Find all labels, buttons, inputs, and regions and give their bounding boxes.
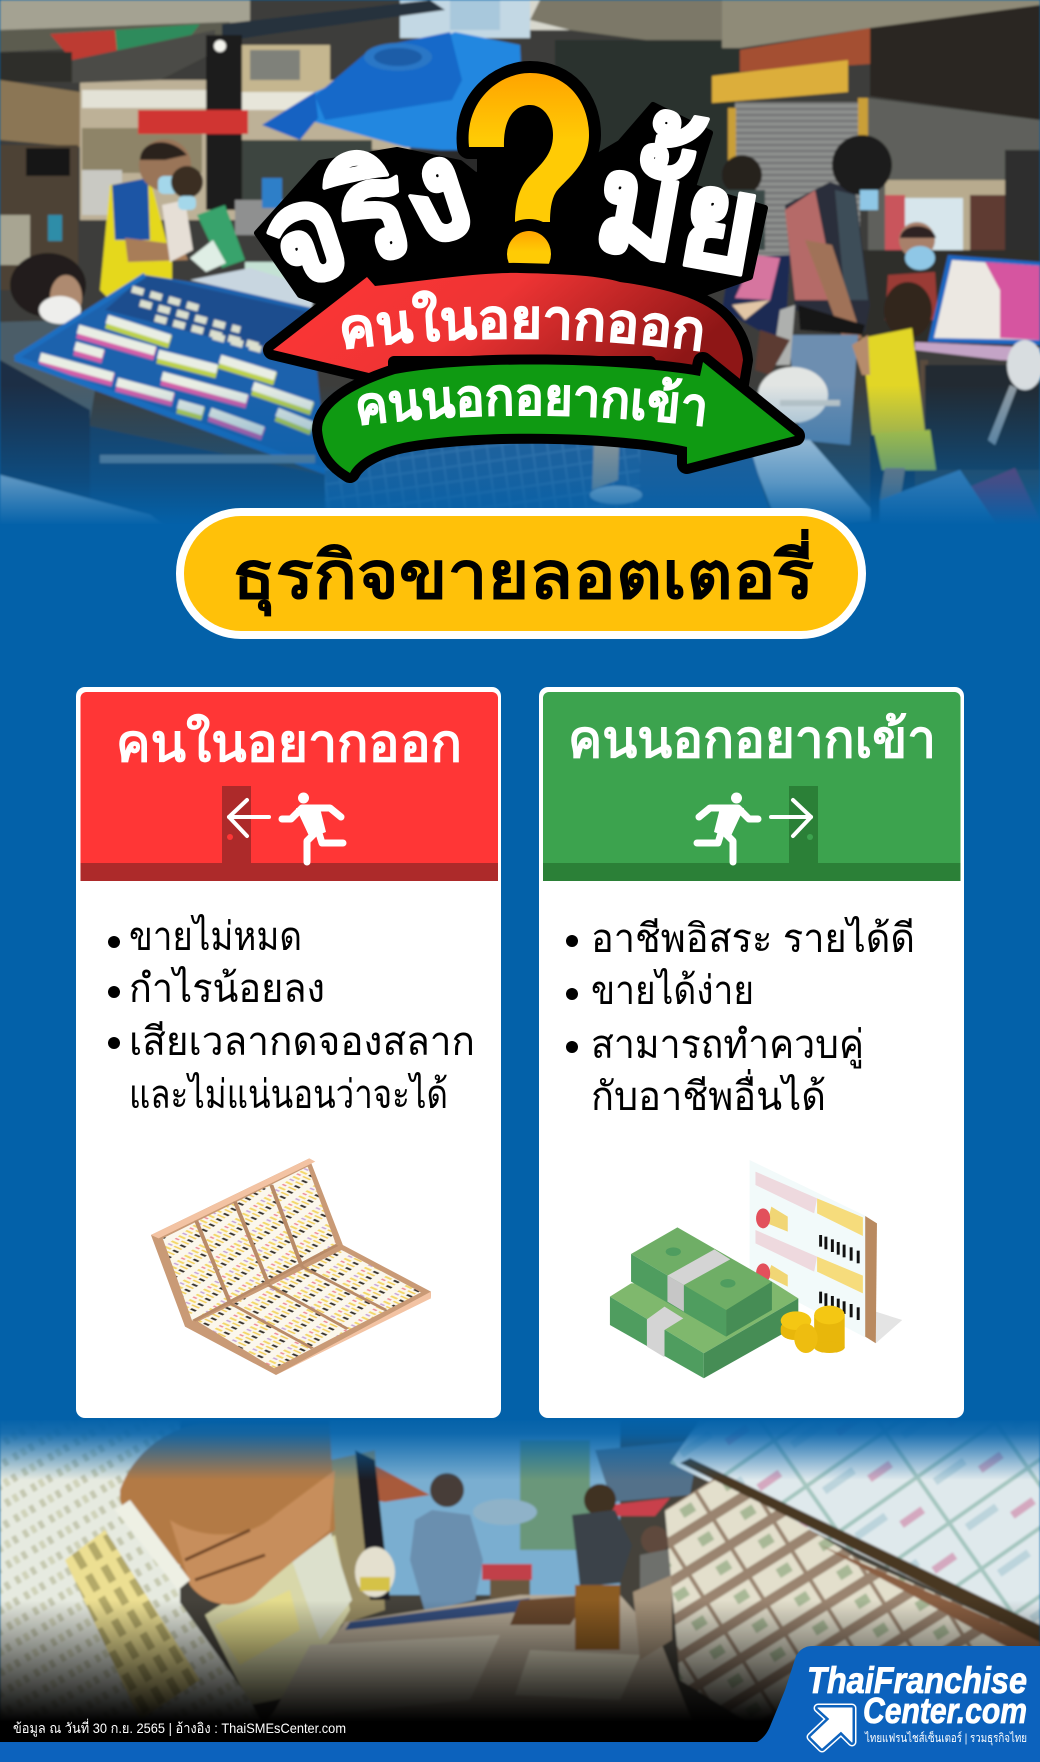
green arrow label: คนนอกอยากเข้า	[358, 376, 705, 427]
panel: outsiders want in	[539, 687, 964, 1418]
green header	[543, 692, 960, 881]
photo: market behind right	[584, 1484, 616, 1516]
upper stack	[631, 1227, 772, 1310]
photo: child in yellow	[884, 282, 932, 338]
photo: man with bag	[325, 1450, 385, 1630]
photo: green signs	[197, 205, 245, 268]
photo: foreground ticket strips	[0, 1505, 270, 1742]
photo: paper under hand	[205, 1535, 350, 1705]
photo: table and floor	[85, 425, 325, 530]
photo: left stall banner	[0, 80, 80, 147]
coins	[781, 1320, 811, 1340]
photo: hand	[120, 1424, 335, 1605]
photo: red banner	[138, 110, 248, 134]
bullet list: outsiders	[566, 916, 915, 1119]
photo: woman at stall	[899, 222, 935, 258]
lower stack	[610, 1282, 798, 1353]
title badge: จริง ? มั้ย with two arrows	[246, 61, 805, 483]
red arrow label: คนในอยากออก	[342, 290, 702, 352]
photo: man in yellow vest	[100, 178, 172, 300]
photo: scooter	[772, 305, 795, 365]
photo: woman seller	[0, 320, 95, 460]
photo: street behind	[80, 80, 410, 220]
photo: ticket paper background	[0, 1420, 180, 1742]
photo: ticket rack	[665, 1475, 1040, 1742]
photo: left ticket table	[722, 255, 790, 345]
photo: wood beam	[680, 1458, 1040, 1642]
black backing of headline	[257, 90, 765, 330]
photo: paper table	[250, 1595, 700, 1742]
bullet list: outsiders: กับอาชีพอื่นได้	[591, 1069, 826, 1119]
subject pill text: ธุรกิจขายลอตเตอรี่	[232, 528, 814, 617]
panel: insiders want out	[76, 687, 501, 1418]
top fade	[0, 1418, 1040, 1480]
photo: red green sign	[50, 30, 118, 62]
red header	[80, 692, 498, 881]
photo: right ticket board	[928, 255, 1040, 345]
photo: right shop wall	[530, 0, 722, 50]
photo: upper tickets	[670, 1420, 1040, 1640]
illustration: folding lottery ticket board	[151, 1158, 431, 1375]
bullet list: insiders: และไม่แน่นอนว่าจะได้	[129, 1072, 448, 1117]
bullet list: insiders	[108, 914, 475, 1117]
source credit: ข้อมูล ณ วันที่ 30 ก.ย. 2565 | อ้างอิง : ThaiSMEsCenter.com	[13, 1719, 346, 1737]
subject pill	[176, 508, 866, 639]
photo: customer with helmet	[785, 182, 870, 332]
header title: คนนอกอยากเข้า	[568, 711, 936, 769]
bullet list: insiders: ขายไม่หมด	[129, 914, 302, 959]
icon: exit door with runner entering right	[697, 786, 818, 863]
icon: logo arrow	[811, 1708, 852, 1748]
logo: ThaiFranchiseCenter.com	[745, 1646, 1040, 1762]
bullet list: insiders: กำไรน้อยลง	[129, 966, 325, 1011]
question mark	[469, 73, 589, 277]
illustration: cash stacks, coins and lottery ticket	[610, 1160, 902, 1378]
photo: ceiling	[0, 0, 250, 32]
photo fade into blue	[0, 385, 1040, 525]
photo: legs on the floor	[640, 430, 775, 530]
icon: exit door with runner leaving left	[222, 786, 343, 863]
photo: woman in blue dress	[430, 1473, 464, 1507]
word: มั้ย: มั้ย	[585, 101, 775, 303]
bullet list: outsiders: ขายได้ง่าย	[591, 968, 754, 1013]
bullet list: outsiders: สามารถทำควบคู่	[591, 1023, 864, 1068]
green arrow	[312, 352, 805, 483]
red arrow	[263, 262, 753, 386]
photo: umbrella	[262, 32, 525, 157]
photo: right mirror and seat	[1007, 340, 1040, 390]
bullet list: insiders: เสียเวลากดจองสลาก	[129, 1020, 475, 1064]
photo: pillar	[206, 35, 242, 210]
photo: person in face shield	[722, 155, 762, 195]
top photo: lottery stalls	[0, 0, 1040, 554]
photo: ticket board	[15, 275, 327, 470]
bottom photo: lottery market	[0, 1405, 1040, 1762]
header title: คนในอยากออก	[116, 713, 462, 773]
bullet list: outsiders: อาชีพอิสระ รายได้ดี	[591, 916, 915, 961]
bottom shade	[0, 1600, 1040, 1743]
photo: sky and market	[330, 1420, 620, 1595]
word: จริง: จริง	[246, 111, 488, 319]
